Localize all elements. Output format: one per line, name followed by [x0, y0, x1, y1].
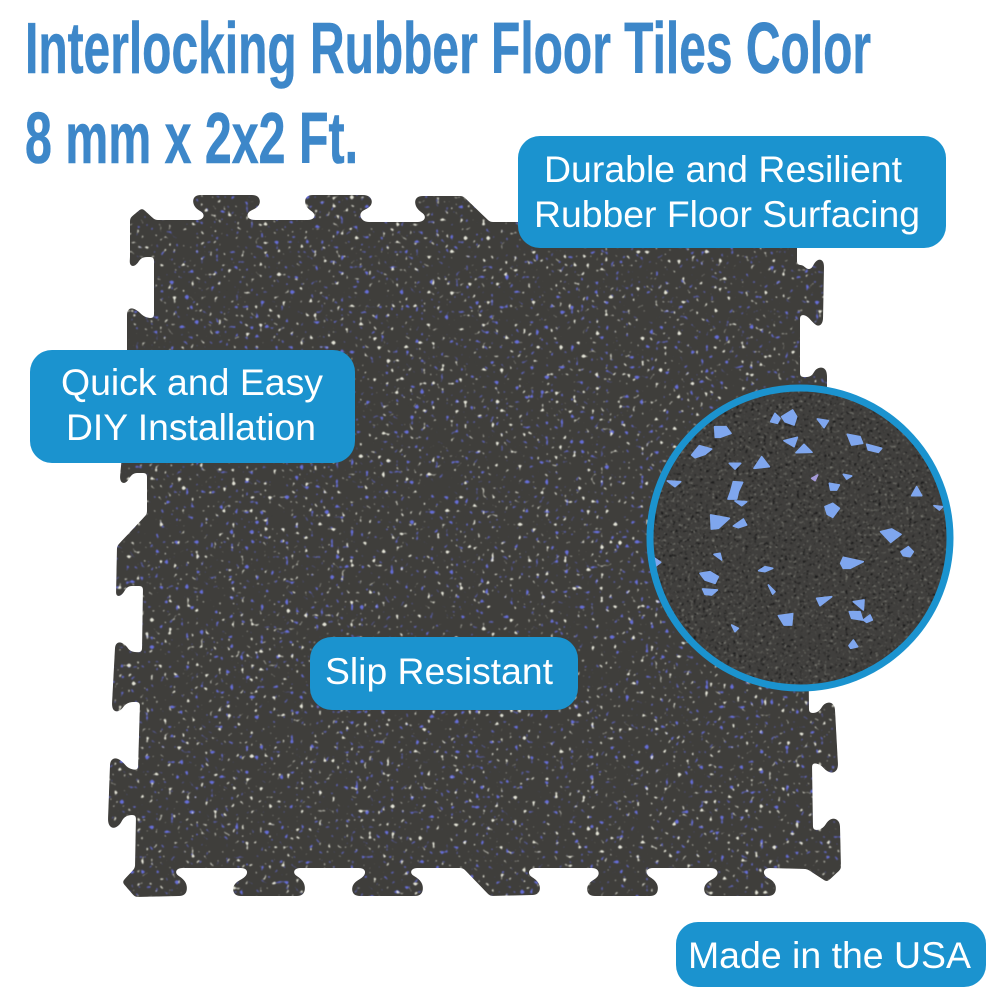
callout: quick and easy installation: DIY Installation	[66, 407, 316, 448]
callout: quick and easy installation: Quick and Easy	[61, 362, 323, 403]
rubber floor tile	[100, 190, 850, 902]
callout: slip resistant: Slip Resistant	[325, 651, 554, 692]
title: 8 mm x 2x2 Ft.	[25, 99, 358, 179]
callout: slip resistant	[310, 637, 578, 710]
callout: durable and resilient: Rubber Floor Surfacing	[534, 194, 920, 235]
callout: durable and resilient: Durable and Resilient	[544, 149, 903, 190]
callout: durable and resilient	[518, 136, 946, 248]
callout: made in the usa	[676, 922, 986, 987]
callout: made in the usa: Made in the USA	[688, 935, 971, 976]
magnified texture circle	[645, 383, 955, 693]
title	[25, 9, 871, 179]
callout: quick and easy installation	[30, 350, 355, 463]
